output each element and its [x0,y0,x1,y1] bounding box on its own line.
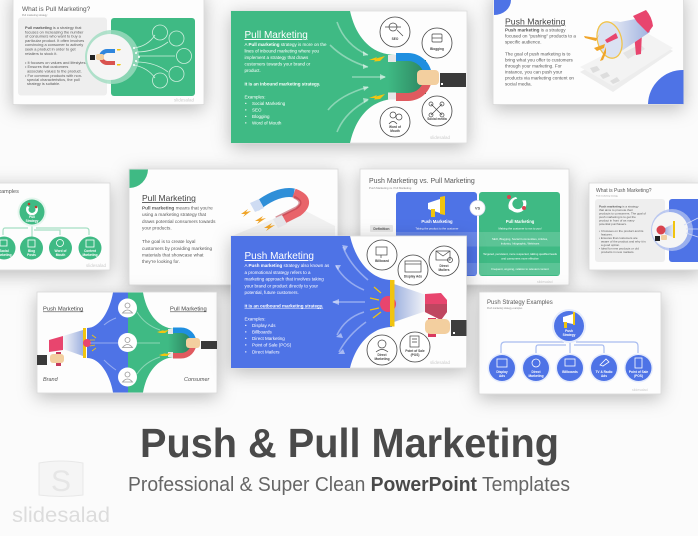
slide: pull marketing overview: implement a strategy that draws [244,55,309,60]
slide: push marketing main: your brand or product directly to your [244,284,319,288]
slide: pull strategy examples: Mouth [56,253,65,257]
slide: push marketing main: • [245,336,247,341]
slide: push strategy examples: Push Strategy Examples [487,300,553,306]
slide: what is push marketing: products in new markets. [601,250,635,254]
slide: push strategy examples: Point of Sale [629,370,648,374]
slide: push marketing intro: social media. [505,82,532,86]
slide: pull strategy examples: Word of [55,249,67,253]
slide: push marketing main: slidesalad [430,360,451,365]
slide: push marketing main: marketing approach that involves taking [244,276,324,282]
slide: push vs pull comparison: Pull Marketing [506,219,535,224]
slide: push marketing intro: Push Marketing [505,16,566,26]
slide: push vs pull comparison: Targeted, persistent, more respected, talking qualified leads [483,252,558,256]
slide: pull strategy examples: slidesalad [86,263,107,268]
slide: push vs pull comparison: Industry, Infographic, Webinars [501,242,540,246]
slide: pull marketing overview: • [245,114,247,119]
slide: push marketing main: Direct Mailers [252,350,280,354]
slide: pull marketing overview: It is an inbound marketing strategy. [244,82,320,86]
slide: push marketing intro: bring what you offer to customers [505,58,574,62]
slide: what is push marketing: Push marketing is a strategy [599,204,639,208]
slide: what is pull marketing: Pull marketing strategy [22,14,48,17]
slide: what is push marketing: • It focuses on the product and its [599,229,644,233]
slide: what is pull marketing: slidesalad [174,98,195,102]
subtitle: Professional & Super Clean PowerPoint Templates [128,473,570,496]
slide: what is pull marketing: retailers to stock it. [25,51,57,56]
slide: push marketing intro: specific audience. [505,40,542,44]
slide: push marketing main: Examples: [244,316,266,322]
slide: pull marketing overview: A Pull marketing strategy is more on the [244,42,327,47]
slide: push marketing main: Billboards [252,330,273,334]
slide: push marketing main: Billboard [375,259,389,263]
slide: push marketing main: Direct [439,264,449,268]
slide: push vs pull comparison: Definition [373,227,390,231]
slide: push strategy examples: (POS) [634,374,643,378]
slide: pull marketing definition: Pull Marketing [142,193,196,203]
slide: what is push marketing: a good option. [601,243,620,247]
slide: what is pull marketing: focuses on increasing the number [25,29,84,34]
slide: pull marketing overview: product. [244,68,261,73]
slide: push vs pull comparison: VS [475,206,480,210]
title: Push & Pull Marketing [140,420,559,466]
slide: what is push marketing: that aims to promote their [599,208,633,212]
slide: push marketing main: potential, future customers. [244,290,299,295]
slide: pull strategy examples: Content [84,249,97,253]
slide: push marketing main: It is an outbound marketing strategy. [244,304,323,308]
slide: pull marketing overview: customers towards your brand or [244,62,311,66]
slide: what is pull marketing: What is Pull Marketing? [22,6,91,13]
slide: pull marketing definition: your products. [142,226,172,230]
icon: logo badge: S [51,465,71,498]
slide: pull marketing overview: • [245,101,247,106]
slide: pull marketing definition: they're looking for. [142,259,180,264]
slide: what is pull marketing: strategy is suitable. [27,81,60,86]
slide: pull marketing overview: Word of [389,125,402,129]
slide: push strategy examples: Direct [531,370,541,374]
slide: push marketing intro: instance, you can push your [505,70,563,74]
logo: slidesalad [12,461,110,527]
slide: push marketing main: • [245,330,247,334]
slide: pull marketing overview: Social Marketing [252,101,286,106]
slide: pull marketing overview: Blogging [252,114,270,119]
slide: push vs pull comparison: Frequent, ongoing, relation to relevant content [491,267,549,271]
slide: what is pull marketing: particular product. It often involves [25,38,84,43]
slide: push marketing main: • [245,323,247,328]
slide: what is pull marketing: • It focuses on values and lifestyles. [25,60,86,65]
slide: push vs pull comparison: and consumers more effective [501,256,539,260]
slide: pull marketing overview: Pull Marketing [244,30,308,41]
slide: what is push marketing: Push marketing strategy [596,194,618,198]
slide: pull marketing overview: Examples: [244,94,266,100]
slide: push marketing main: Direct Marketing [252,336,285,341]
slide: push strategy examples: Billboards [562,370,578,374]
slide: push marketing main: Display Ads [404,274,422,278]
slide: pull strategy examples: Marketing [82,253,98,257]
logo: slidesalad: slidesalad [12,504,110,527]
slide: push marketing main: Display Ads [252,323,276,328]
slide: push marketing main: Marketing [374,357,390,361]
slide: pull marketing definition [129,169,338,285]
slide: push marketing main: A Push marketing strategy also known as [244,263,330,268]
slide: push marketing intro: through your marketing. For [505,64,562,68]
slide: pull marketing overview: • [245,120,247,126]
slide: pull marketing overview: slidesalad [430,135,451,140]
slide: push marketing intro: Push marketing is a strategy [505,28,566,32]
slide: push marketing intro [493,0,684,104]
slide: push marketing main [231,236,466,368]
slide: push marketing main: Direct [377,353,387,357]
slide: push vs pull diagram: Consumer [184,377,211,383]
slide: push vs pull comparison: Taking the product to the customer [416,226,459,230]
slide: pull marketing overview: SEO [392,37,399,41]
slide: pull strategy examples [0,183,110,270]
slide: what is push marketing: What is Push Marketing? [596,188,652,194]
slide: push marketing main: • [245,350,247,354]
slide: push vs pull comparison: SEO, Blogging, Social Communities, Articles, [492,237,548,241]
slide: what is push marketing: potential purchasers. [599,222,627,226]
slide: pull strategy examples: Blog [28,249,35,253]
slide: pull marketing overview: lines of inbound marketing where you [244,48,320,54]
slide: push strategy examples: Push marketing strategy examples [487,307,523,310]
slide: what is pull marketing: of consumers who want to buy a [25,34,82,39]
slide: what is pull marketing: special characteristics, the pull [27,77,80,82]
slide: push vs pull diagram [37,292,217,393]
slide: what is push marketing: products to consumers. The goal of [599,212,646,216]
slide: pull marketing definition: draws potential consumers towards [142,219,216,224]
slide: pull marketing overview: Mouth [390,129,400,133]
slide: push marketing main: Point of Sale [405,349,425,353]
slide: push strategy examples: Push [565,329,573,333]
slide: push strategy examples: Display [496,370,508,374]
slide: push marketing main: (POS) [411,353,419,357]
slide: pull marketing overview: Word of Mouth [252,120,282,126]
slide: what is pull marketing: • Ensures that customers [25,64,68,69]
slide: pull marketing definition: materials that showcase what [142,252,204,258]
slide: push vs pull comparison: Push Marketing vs. Pull Marketing [369,178,475,185]
slide: push vs pull comparison [360,169,569,285]
slide: push marketing main: Point of Sale (POS) [252,343,292,348]
slide: what is push marketing: push marketing is to get the [599,215,636,219]
slide: push vs pull diagram: Brand [43,377,59,383]
slide: push vs pull comparison: Making the customer to run to you! [498,226,542,230]
slide: push marketing main: Mailers [438,268,450,272]
slide: what is push marketing: • Ensures that customers are [599,236,638,240]
slide: push vs pull comparison: Push Marketing vs. Pull Marketing [369,186,412,190]
slide: push vs pull comparison: Push Marketing [421,219,453,224]
slide: what is push marketing: product in front of as many [599,218,635,222]
slide: pull marketing overview: • [245,108,247,112]
slide: pull marketing definition: using a marketing strategy that [142,212,207,217]
slide: what is pull marketing: seek a product in order to get [25,46,77,52]
slide: pull strategy examples: Pull [29,215,35,219]
slide: push marketing intro: The goal of push marketing is to [505,52,571,56]
slide: what is push marketing: features. [601,232,613,236]
slide: what is push marketing: aware of the product and why it is [601,240,646,244]
slide: push strategy examples: TV & Radio [595,370,613,374]
slide: push strategy examples: Strategy [563,333,576,337]
slide: what is push marketing: • Ideal for new products or old [599,246,639,250]
slide: pull marketing definition: customers by providing marketing [142,246,212,251]
slide: what is pull marketing: associate values to the product. [27,68,82,73]
slide: push strategy examples: Ads [601,374,607,378]
slide: pull marketing overview: Blogging [430,47,444,51]
slide: what is pull marketing: • For common products with non- [25,73,83,78]
slide: push vs pull diagram: Push Marketing [43,306,83,312]
slide: push marketing main: • [245,343,247,348]
slide: push marketing intro: focused on "pushing" products to a [505,34,576,38]
slide: push vs pull comparison: slidesalad [537,280,553,284]
slide: pull strategy examples: Strategy [26,219,39,223]
slide: push strategy examples: slidesalad [632,388,648,392]
slide: push strategy examples: Marketing [528,374,544,378]
slide: pull strategy examples: Posts [27,253,36,257]
slide: pull marketing overview: SEO [252,108,262,112]
slide: push marketing intro: products via marketing content on [505,76,574,80]
slide: push strategy examples: Ads [499,374,505,378]
slide: what is pull marketing: convincing a consumer to actively [25,42,83,47]
slide: push strategy examples [479,292,661,394]
slide: pull marketing overview [231,11,467,143]
slide: pull marketing definition: Pull marketing means that you're [142,206,213,210]
slide: push vs pull diagram: Pull Marketing [170,306,207,312]
slide: pull marketing overview: Social media [427,117,447,121]
slide: what is push marketing [589,183,698,270]
slide: what is pull marketing [13,0,204,104]
slide: push marketing main: Push Marketing [244,251,314,262]
slide: pull marketing definition: The goal is to create loyal [142,239,195,244]
slide: what is pull marketing: Pull marketing is a strategy that [25,25,82,30]
slide: push marketing main: a promotional strategy refers to a [244,270,311,275]
